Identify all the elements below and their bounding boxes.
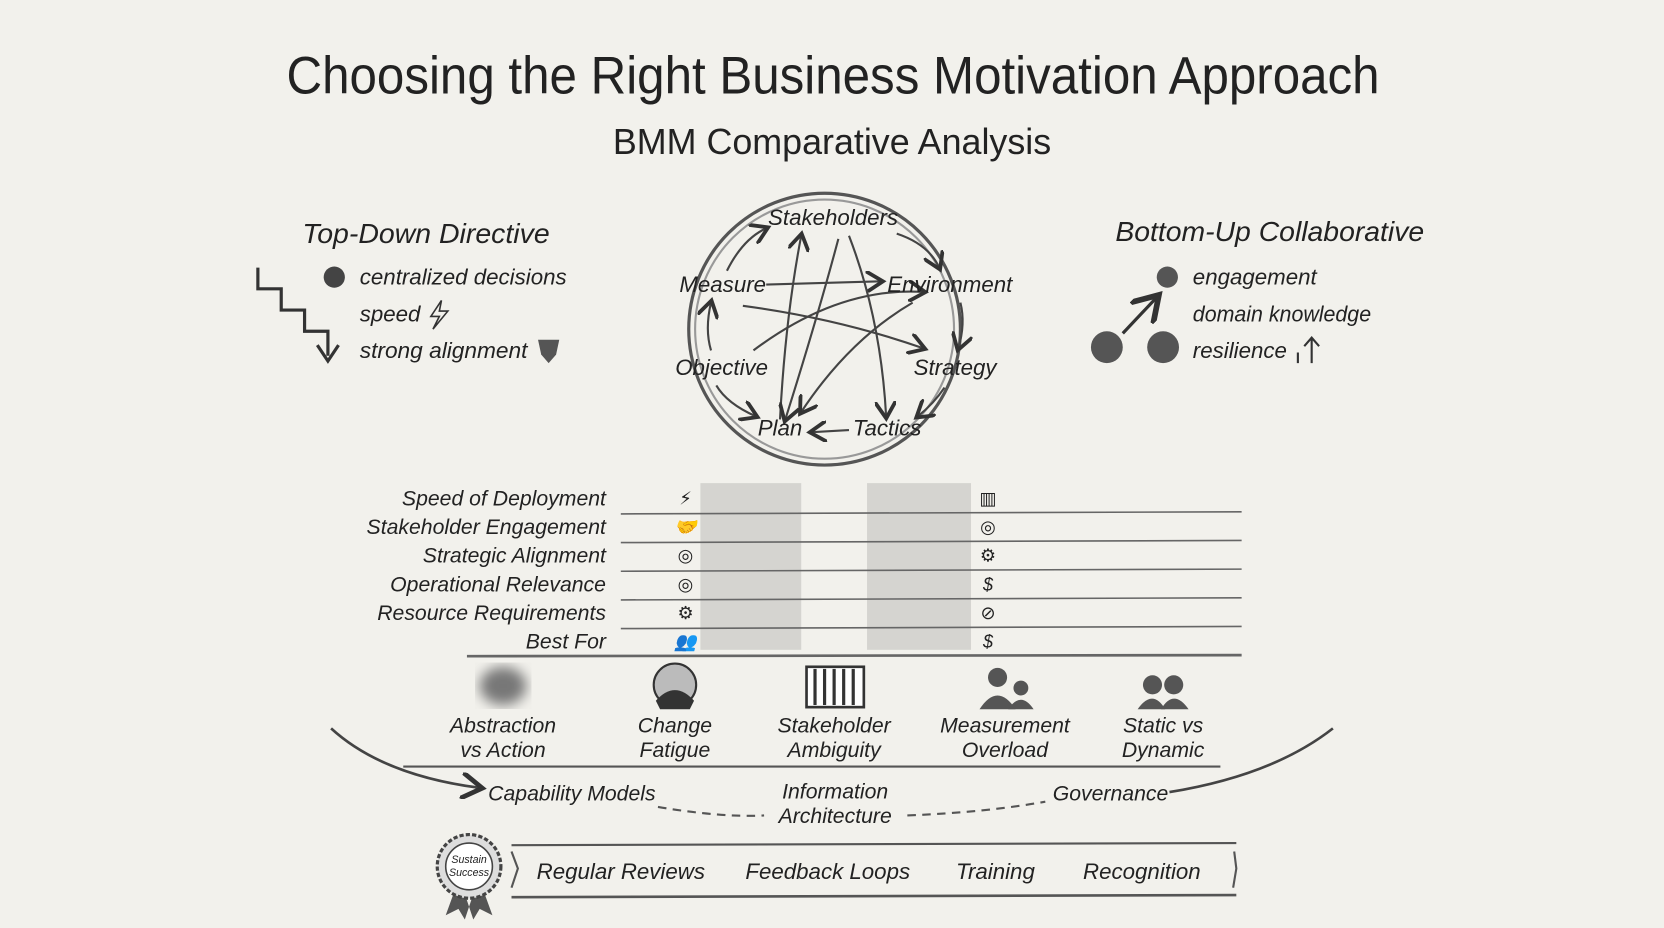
challenges row: Stakeholder [778,715,892,738]
icon: stair arrow [258,268,339,361]
cycle diagram [675,193,1013,465]
comparison table: Stakeholder Engagement [367,516,607,539]
panel: top-down directive: speed [360,302,421,327]
comparison table: Strategic Alignment [423,545,607,568]
label: environment: Environment [887,272,1013,297]
badge: sustain success: Sustain [451,854,487,866]
banner: practices [512,843,1236,897]
icon: people [980,668,1034,709]
enablers: Capability Models [488,783,656,806]
heading: top-down: Top-Down Directive [302,218,550,249]
badge: sustain success: Success [449,867,490,879]
label: objective: Objective [675,355,768,380]
challenges row: vs Action [460,739,546,762]
comparison table: ⚙ [677,603,694,623]
challenges row: Measurement [940,715,1071,738]
enablers: Information [782,780,888,803]
subtitle: BMM Comparative Analysis [613,121,1051,162]
enablers [331,728,1333,828]
panel: bottom-up collaborative: engagement [1193,265,1317,290]
banner: practices: Feedback Loops [745,859,910,884]
comparison table: ◎ [678,574,693,594]
comparison table: 🤝 [674,517,699,537]
icon: people 2 [1138,675,1189,709]
challenges row: Dynamic [1122,739,1205,762]
label: stakeholders: Stakeholders [768,205,898,230]
banner: practices: Training [956,859,1035,884]
comparison table: ◎ [980,517,996,537]
panel: bottom-up collaborative [1091,216,1424,363]
comparison table: ⊘ [980,603,996,623]
challenges row: Static vs [1123,715,1204,738]
heading: bottom-up: Bottom-Up Collaborative [1115,216,1424,247]
challenges row [448,664,1205,762]
panel: top-down directive [258,218,567,363]
comparison table: Speed of Deployment [402,487,607,510]
icon: blur [480,667,526,705]
challenges row: Change [638,715,712,738]
panel: bottom-up collaborative: resilience [1193,338,1287,363]
icon: building [807,667,864,707]
icon: face [654,664,696,709]
comparison table [367,483,1242,656]
comparison table: 👥 [674,632,699,652]
comparison table: Operational Relevance [390,573,606,596]
challenges row: Ambiguity [786,739,882,762]
comparison table: Resource Requirements [377,602,606,625]
comparison table: $ [982,574,994,594]
banner: practices: Regular Reviews [537,859,705,884]
enablers: Architecture [777,805,892,828]
title: Choosing the Right Business Motivation Approach [287,46,1380,105]
comparison table: ◎ [678,546,693,566]
comparison table: Best For [526,631,607,654]
banner: practices: Recognition [1083,859,1201,884]
panel: top-down directive: strong alignment [360,338,528,363]
icon: lightning [431,300,448,329]
comparison table: ⚙ [980,546,996,566]
challenges row: Abstraction [448,715,556,738]
comparison table: ⚡ [679,488,692,508]
label: measure: Measure [679,272,766,297]
label: strategy: Strategy [914,355,998,380]
panel: bottom-up collaborative: domain knowledge [1193,302,1371,327]
icon: shield [538,340,559,363]
comparison table: ▥ [979,488,997,508]
comparison table: $ [982,632,994,652]
label: plan: Plan [758,415,802,440]
challenges row: Fatigue [640,739,711,762]
enablers: Governance [1053,783,1168,806]
panel: top-down directive: centralized decisions [360,265,567,290]
badge: sustain success [437,835,501,920]
icon: up arrow [1298,338,1319,363]
challenges row: Overload [962,739,1049,762]
label: tactics: Tactics [853,415,921,440]
